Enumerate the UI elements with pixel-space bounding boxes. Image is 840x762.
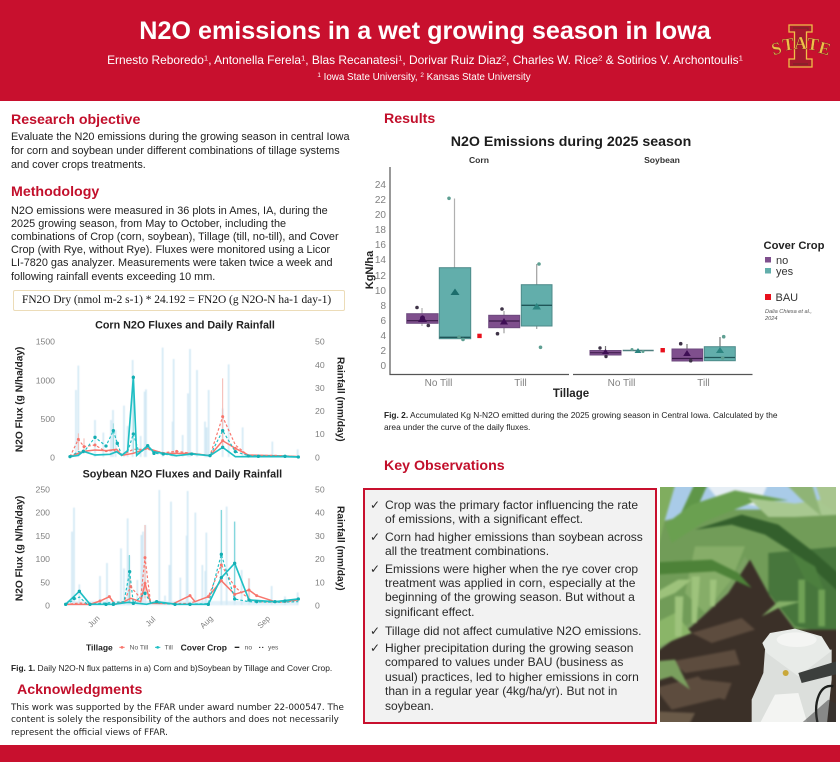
legend: Cover Crop bbox=[181, 642, 227, 652]
legend: No Till bbox=[130, 645, 149, 652]
x axis months bbox=[86, 614, 273, 630]
right y axis bbox=[315, 337, 325, 462]
right y axis: 10 bbox=[315, 577, 325, 587]
y axis ticks: 12 bbox=[375, 271, 386, 282]
panel: key observations bbox=[363, 488, 657, 724]
observation: crop factor: ✓ bbox=[370, 498, 380, 512]
y axis ticks: 22 bbox=[375, 195, 386, 206]
footer banner bbox=[0, 745, 840, 762]
text: acknowledgments: This work was supported by the FFAR under award number 22-000547. The bbox=[11, 702, 344, 712]
observation: precipitation: than in a regular year (4kg/ha/yr). But not in bbox=[385, 684, 617, 698]
left y axis bbox=[36, 484, 50, 610]
text: research objective: and cover crops treatments. bbox=[11, 158, 146, 170]
legend: no bbox=[245, 645, 252, 652]
left y axis: 100 bbox=[36, 554, 50, 564]
heading: research objective: Research objective bbox=[11, 112, 140, 128]
left y axis bbox=[36, 337, 55, 462]
legend: cover crop: Cover Crop bbox=[764, 240, 825, 252]
authors: Ernesto Reboredo1, Antonella Ferela1, Blas Recanatesi1, Dorivar Ruiz Diaz2, Charles W. Rice2 & Sotirios V. Archontoulis1 bbox=[107, 53, 743, 67]
left y axis: 500 bbox=[41, 414, 55, 424]
flux points bbox=[64, 553, 300, 606]
corn no till boxes bbox=[407, 196, 471, 341]
observation: crop factor: of emissions, with a significant effect. bbox=[385, 512, 583, 526]
y axis ticks: 16 bbox=[375, 240, 386, 251]
y axis ticks: 8 bbox=[380, 301, 386, 312]
y axis ticks: 20 bbox=[375, 210, 386, 221]
y axis ticks: 0 bbox=[380, 361, 386, 372]
x axis labels: Till bbox=[697, 378, 710, 389]
text: acknowledgments: represent the official views of FFAR. bbox=[11, 728, 168, 738]
observation: rye cover crop: significant effect. bbox=[385, 604, 475, 618]
observation: tillage: ✓ bbox=[370, 624, 380, 638]
icon: Iowa State logo: A bbox=[794, 33, 807, 53]
y axis ticks: 10 bbox=[375, 286, 386, 297]
observation: rye cover crop: beginning of the growing season. But without a bbox=[385, 590, 635, 604]
affiliations: 1 Iowa State University, 2 Kansas State University bbox=[317, 72, 531, 83]
right y axis: 0 bbox=[315, 452, 320, 462]
flux lines bbox=[66, 510, 298, 604]
x axis labels: No Till bbox=[608, 378, 635, 389]
right y axis: 30 bbox=[315, 531, 325, 541]
x axis title: Tillage bbox=[553, 388, 589, 400]
y axis title: rainfall: Rainfall (mm/day) bbox=[335, 357, 346, 442]
right y axis: 20 bbox=[315, 554, 325, 564]
text: methodology: following rainfall events exceeding 10 mm. bbox=[11, 270, 215, 282]
observation: rye cover crop: ✓ bbox=[370, 562, 380, 576]
left y axis: 0 bbox=[45, 600, 50, 610]
observation: corn vs soybean: Corn had higher emissions than soybean across bbox=[385, 530, 643, 544]
caption: figure 2: Fig. 2. Accumulated Kg N-N2O emitted during the 2025 growing season in Central Iowa. Calculated by the bbox=[384, 410, 778, 420]
caption: figure 2: area under the curve of the daily fluxes. bbox=[384, 422, 530, 432]
chart title: Corn N2O Fluxes and Daily Rainfall bbox=[95, 320, 275, 332]
legend: yes bbox=[268, 645, 279, 652]
caption: figure 1: Fig. 1. Daily N2O-N flux patterns in a) Corn and b)Soybean by Tillage and Cover Crop. bbox=[11, 663, 332, 673]
legend: cover crop: yes bbox=[776, 266, 794, 278]
icon: Iowa State logo: T bbox=[781, 33, 796, 55]
x axis months: Sep bbox=[256, 614, 273, 630]
left y axis: 250 bbox=[36, 484, 50, 494]
y axis ticks: 14 bbox=[375, 255, 386, 266]
legend: cover crop: BAU bbox=[776, 292, 798, 304]
x axis labels bbox=[425, 378, 710, 389]
text: methodology bbox=[11, 204, 339, 282]
y axis ticks: 24 bbox=[375, 180, 386, 191]
left y axis: 1000 bbox=[36, 375, 55, 385]
legend bbox=[86, 642, 279, 652]
observation: precipitation: soybean. bbox=[385, 698, 434, 712]
title: N2O emissions in a wet growing season in Iowa bbox=[139, 17, 711, 45]
legend: cover crop: no bbox=[776, 255, 788, 267]
formula box: FN2O Dry (nmol m-2 s-1) * 24.192 = FN2O (g N2O-N ha-1 day-1) bbox=[22, 294, 331, 306]
text: methodology: Crop (with Rye, without Rye). Fluxes were monitored using a Licor bbox=[11, 244, 330, 256]
observation: crop factor: Crop was the primary factor influencing the rate bbox=[385, 498, 638, 512]
heading: results: Results bbox=[384, 111, 435, 127]
icon: Iowa State logo: T bbox=[806, 33, 820, 55]
legend: Tillage bbox=[86, 642, 113, 652]
soybean BAU marker bbox=[660, 348, 665, 352]
rainfall bars bbox=[67, 490, 298, 605]
y axis title: rainfall: Rainfall (mm/day) bbox=[335, 506, 346, 591]
y axis ticks: 18 bbox=[375, 225, 386, 236]
y axis ticks: 6 bbox=[380, 316, 386, 327]
y axis title: flux: N2O Flux (g N/ha/day) bbox=[14, 347, 25, 452]
caption: figure 2 bbox=[384, 410, 778, 432]
chart: soybean N2O fluxes and rainfall bbox=[14, 469, 346, 652]
observation: rye cover crop bbox=[370, 562, 638, 618]
heading: key observations: Key Observations bbox=[384, 458, 505, 474]
chart title: Soybean N2O Fluxes and Daily Rainfall bbox=[83, 469, 282, 481]
text: research objective: for corn and soybean under different combinations of tillage systems bbox=[11, 145, 340, 157]
y axis title: flux: N2O Flux (g N/ha/day) bbox=[14, 496, 25, 601]
flux points bbox=[68, 376, 300, 459]
left y axis: 200 bbox=[36, 508, 50, 518]
x axis months: Jul bbox=[144, 615, 158, 628]
left y axis: 1500 bbox=[36, 337, 55, 347]
photo: corn field with gas chamber bbox=[660, 487, 836, 722]
left y axis: 0 bbox=[50, 452, 55, 462]
chart: corn N2O fluxes and rainfall bbox=[14, 320, 346, 462]
observation: precipitation: ✓ bbox=[370, 641, 380, 655]
corn BAU marker bbox=[477, 334, 482, 338]
heading: acknowledgments: Acknowledgments bbox=[17, 682, 142, 698]
right y axis: 0 bbox=[315, 600, 320, 610]
observation: crop factor bbox=[370, 498, 638, 526]
x axis labels: Till bbox=[514, 378, 527, 389]
legend: cover crop bbox=[764, 240, 825, 322]
right y axis: 50 bbox=[315, 337, 325, 347]
heading: methodology: Methodology bbox=[11, 184, 99, 200]
right y axis: 30 bbox=[315, 383, 325, 393]
y axis ticks: 4 bbox=[380, 331, 386, 342]
observation: rye cover crop: treatment was applied in corn, especially at the bbox=[385, 576, 635, 590]
text: acknowledgments bbox=[10, 702, 344, 738]
facet label: soybean: Soybean bbox=[644, 155, 680, 165]
right y axis: 20 bbox=[315, 406, 325, 416]
soybean no till boxes bbox=[590, 346, 654, 358]
formula box bbox=[13, 290, 345, 311]
right y axis: 40 bbox=[315, 508, 325, 518]
chart title: N2O Emissions during 2025 season bbox=[451, 134, 691, 150]
legend: cover crop: Dalia Chiesa et al., bbox=[765, 309, 812, 315]
text: research objective: Evaluate the N20 emissions during the growing season in central Iowa bbox=[11, 131, 350, 143]
field scene bbox=[655, 480, 840, 726]
x axis months: Aug bbox=[198, 614, 215, 630]
text: research objective bbox=[11, 131, 350, 170]
text: methodology: LI-7820 gas analyzer. Measurements were taken twice a week and bbox=[11, 257, 333, 269]
rainfall bars bbox=[76, 348, 298, 457]
observation: precipitation bbox=[370, 641, 639, 712]
text: acknowledgments: content is solely the responsibility of the authors and does not necessarily bbox=[11, 715, 339, 725]
y axis ticks bbox=[375, 180, 386, 372]
right y axis: 40 bbox=[315, 360, 325, 370]
gas chamber instrument bbox=[752, 629, 840, 726]
observation: corn vs soybean: all the treatment combinations. bbox=[385, 544, 549, 558]
right y axis: 50 bbox=[315, 484, 325, 494]
y axis title: KgN/ha bbox=[364, 250, 376, 289]
right y axis bbox=[315, 484, 325, 610]
chart: N2O emissions box plot bbox=[364, 134, 825, 400]
corn till boxes bbox=[489, 262, 552, 349]
flux lines bbox=[70, 375, 298, 457]
y axis ticks: 2 bbox=[380, 346, 386, 357]
axes bbox=[390, 167, 752, 374]
observation: tillage: Tillage did not affect cumulative N2O emissions. bbox=[385, 624, 641, 638]
soybean till boxes bbox=[672, 335, 735, 363]
observation: corn vs soybean bbox=[370, 530, 643, 558]
text: methodology: combinations of Crop (corn, soybean), Tillage (till, no-till), and Cover bbox=[11, 231, 339, 243]
left y axis: 150 bbox=[36, 531, 50, 541]
x axis months: Jun bbox=[86, 614, 102, 629]
legend: cover crop: 2024 bbox=[764, 316, 777, 322]
x axis labels: No Till bbox=[425, 378, 452, 389]
icon: Iowa State logo bbox=[770, 24, 832, 68]
observation: precipitation: compared to values under BAU (business as bbox=[385, 655, 623, 669]
observation: precipitation: Higher precipitation during the growing season bbox=[385, 641, 633, 655]
observation: corn vs soybean: ✓ bbox=[370, 530, 380, 544]
header banner bbox=[0, 0, 840, 101]
observation: precipitation: usual) practices, led to higher emissions in corn bbox=[385, 670, 639, 684]
left y axis: 50 bbox=[40, 577, 50, 587]
right y axis: 10 bbox=[315, 429, 325, 439]
observation: rye cover crop: Emissions were higher when the rye cover crop bbox=[385, 562, 638, 576]
legend: Till bbox=[165, 645, 173, 652]
text: methodology: N2O emissions were measured in 36 plots in Ames, IA, during the bbox=[11, 204, 328, 216]
text: methodology: 2025 growing season, from May to October, including the bbox=[11, 218, 286, 230]
facet label: corn: Corn bbox=[469, 155, 489, 165]
